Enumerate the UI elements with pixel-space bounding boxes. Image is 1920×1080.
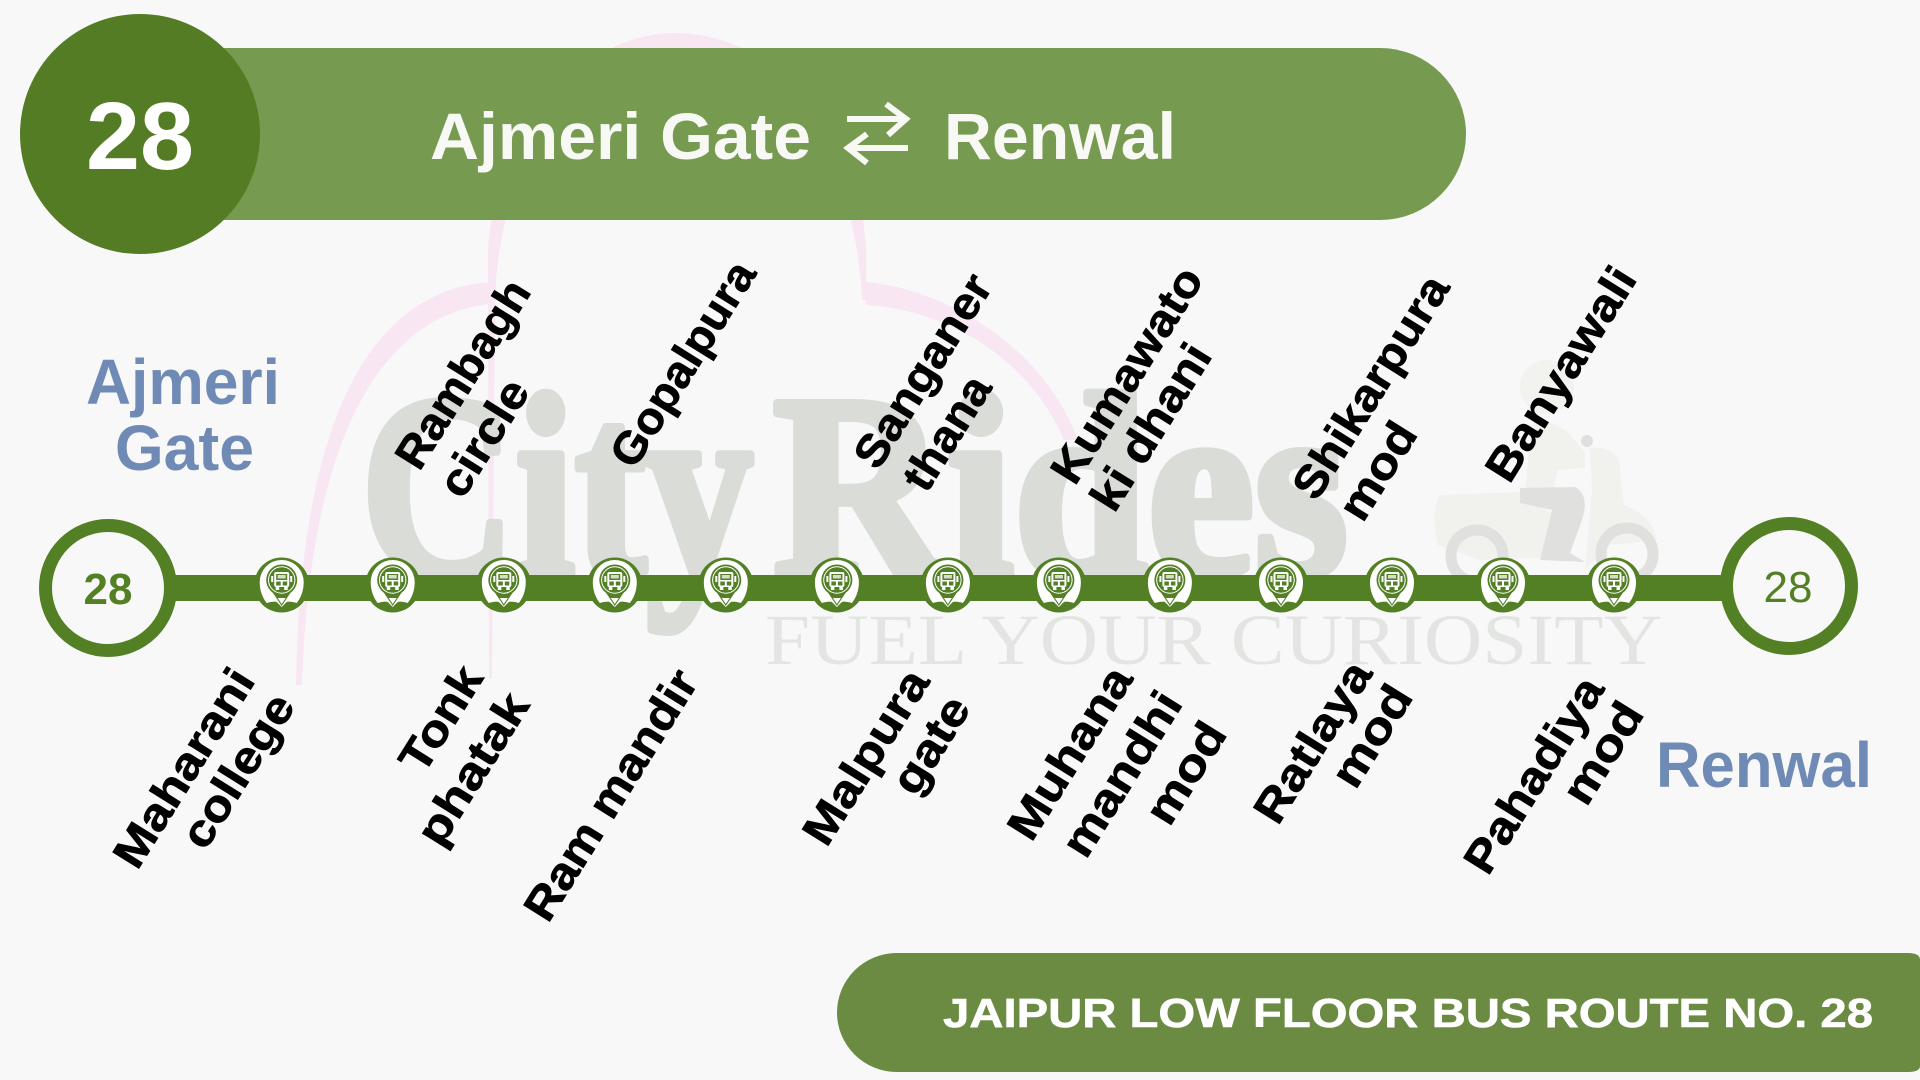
stop label: Sanganer thana: Sanganer (843, 264, 1002, 477)
stop label: Rambagh circle: Rambagh (385, 270, 541, 478)
stop label: Maharani college: college (170, 684, 305, 857)
stop label: Malpura gate (792, 659, 980, 854)
stop label: Pahadiya mod (1453, 666, 1654, 882)
stop label: Muhana mandhi mod (997, 656, 1237, 866)
stop label: Tonk phatak (388, 655, 540, 854)
route number circle: 28 (86, 83, 194, 190)
watermark: CityRides logo: Rides (773, 342, 1348, 632)
stop label: Ratlaya mod: mod (1321, 675, 1423, 796)
stop label: Shikarpura mod: Shikarpura (1282, 265, 1460, 508)
stop label: Sanganer thana: thana (892, 365, 1002, 500)
header banner (140, 48, 1466, 220)
start terminal (46, 526, 170, 650)
stop label: Ratlaya mod: Ratlaya (1243, 651, 1383, 832)
stop label: Muhana mandhi mod: Muhana (997, 656, 1143, 849)
watermark: CityRides logo: City (361, 342, 753, 632)
stop label: Tonk phatak: Tonk (388, 655, 494, 781)
origin label (86, 346, 280, 484)
route line (170, 575, 1725, 601)
end terminal (1726, 524, 1852, 648)
stop label: Malpura gate: Malpura (792, 659, 940, 854)
header title: origin: Ajmeri Gate (430, 99, 811, 173)
origin label: Ajmeri (86, 346, 280, 418)
stop label: Gopalpura: Gopalpura (599, 251, 766, 476)
destination label: Renwal (1656, 729, 1872, 801)
stop label: Muhana mandhi mod: mandhi (1051, 682, 1192, 866)
stop label: Muhana mandhi mod: mod (1135, 712, 1237, 833)
stop label: Kumawato ki dhani: Kumawato (1040, 257, 1213, 492)
stop label: Pahadiya mod: mod (1552, 692, 1654, 813)
stop label: Ram mandir: Ram mandir (513, 660, 708, 930)
watermark: CityRides logo (361, 342, 1348, 632)
footer banner: JAIPUR LOW FLOOR BUS ROUTE NO. 28 (943, 990, 1873, 1036)
stop label: Maharani college (102, 659, 305, 877)
stop label: Malpura gate: gate (881, 686, 980, 803)
stop label: Pahadiya mod: Pahadiya (1453, 666, 1615, 882)
icon: two-way arrows (847, 104, 908, 163)
header title: destination: Renwal (944, 99, 1176, 173)
stop label: Banyawali: Banyawali (1475, 257, 1647, 490)
stop label: Ratlaya mod (1243, 651, 1423, 832)
stop label: Shikarpura mod: mod (1328, 412, 1427, 529)
end terminal: 28 (1764, 563, 1812, 612)
origin label: Gate (115, 412, 254, 484)
watermark: scooter rider (1434, 360, 1657, 582)
start terminal: 28 (84, 565, 132, 614)
route number circle (20, 14, 260, 254)
stop label: Rambagh circle: circle (428, 370, 539, 506)
stop label: Kumawato ki dhani: ki dhani (1079, 334, 1222, 520)
watermark: pink arches (296, 33, 1078, 685)
footer banner (837, 953, 1920, 1072)
stop label: Tonk phatak: phatak (406, 682, 540, 854)
stop icons (254, 558, 1642, 612)
stop label: Maharani college: Maharani (102, 659, 265, 877)
watermark: tagline: FUEL YOUR CURIOSITY (765, 600, 1662, 680)
